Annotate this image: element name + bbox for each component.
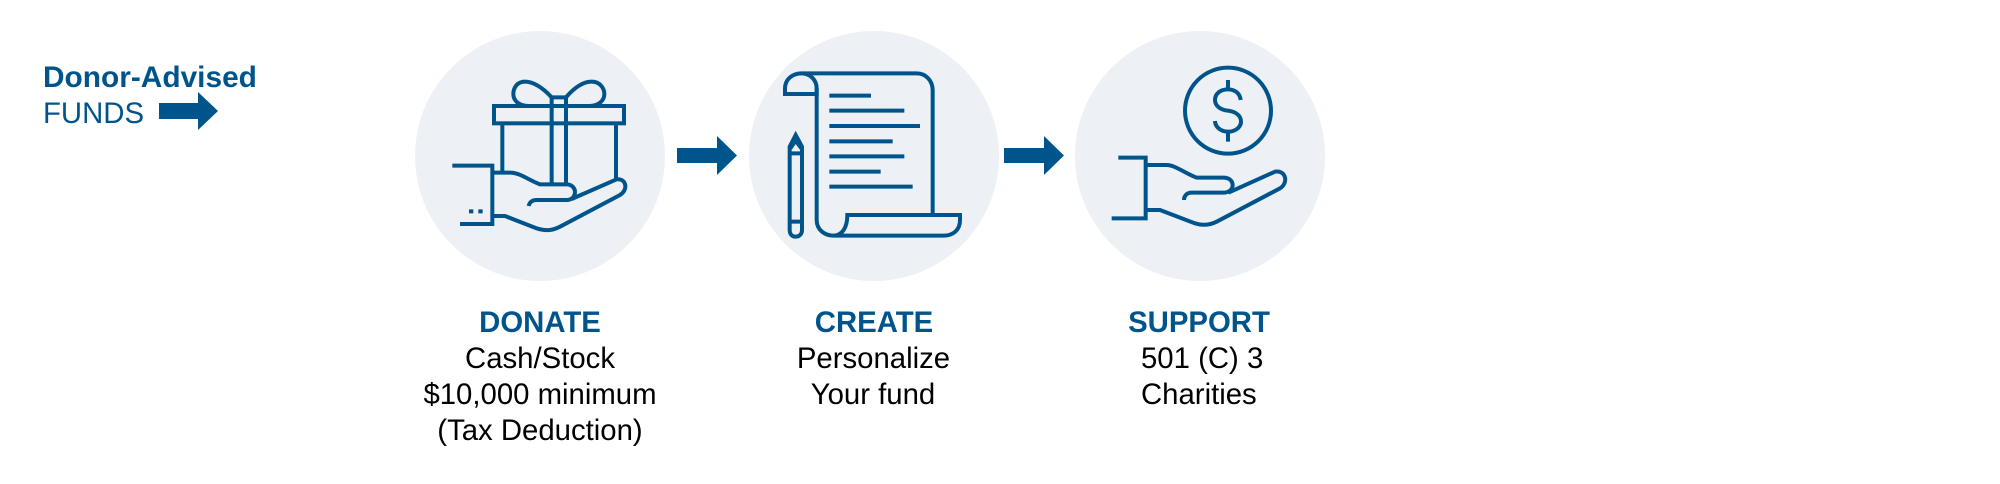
text: create details: Your fund <box>811 378 935 411</box>
text: support details: Charities <box>1141 378 1257 411</box>
arrow: donate to create <box>677 136 737 175</box>
panel: create <box>749 31 999 411</box>
icon background circle: support <box>1075 31 1325 281</box>
text: donate details: $10,000 minimum <box>423 378 657 411</box>
icon: scroll and pencil <box>785 73 960 237</box>
text: support details <box>1141 342 1263 411</box>
icon background circle: donate <box>415 31 665 281</box>
text: support details: 501 (C) 3 <box>1141 342 1263 375</box>
arrow: create to support <box>1004 136 1064 175</box>
label: SUPPORT: SUPPORT <box>1128 306 1270 339</box>
text: donate details: (Tax Deduction) <box>437 414 643 447</box>
heading: Donor-Advised Funds: Donor-Advised <box>43 61 257 94</box>
text: create details <box>797 342 950 411</box>
icon: gift on open hand <box>452 82 625 230</box>
icon: coin over open hand <box>1112 68 1285 225</box>
label: CREATE: CREATE <box>815 306 933 339</box>
panel: support <box>1075 31 1325 411</box>
icon background circle: create <box>749 31 999 281</box>
text: create details: Personalize <box>797 342 950 375</box>
arrow: heading pointer <box>159 92 218 130</box>
heading: Donor-Advised Funds <box>43 61 257 130</box>
label: DONATE: DONATE <box>479 306 601 339</box>
heading: Donor-Advised Funds: FUNDS <box>43 97 144 130</box>
text: donate details: Cash/Stock <box>465 342 615 375</box>
panel: donate <box>415 31 665 447</box>
text: donate details <box>423 342 657 447</box>
